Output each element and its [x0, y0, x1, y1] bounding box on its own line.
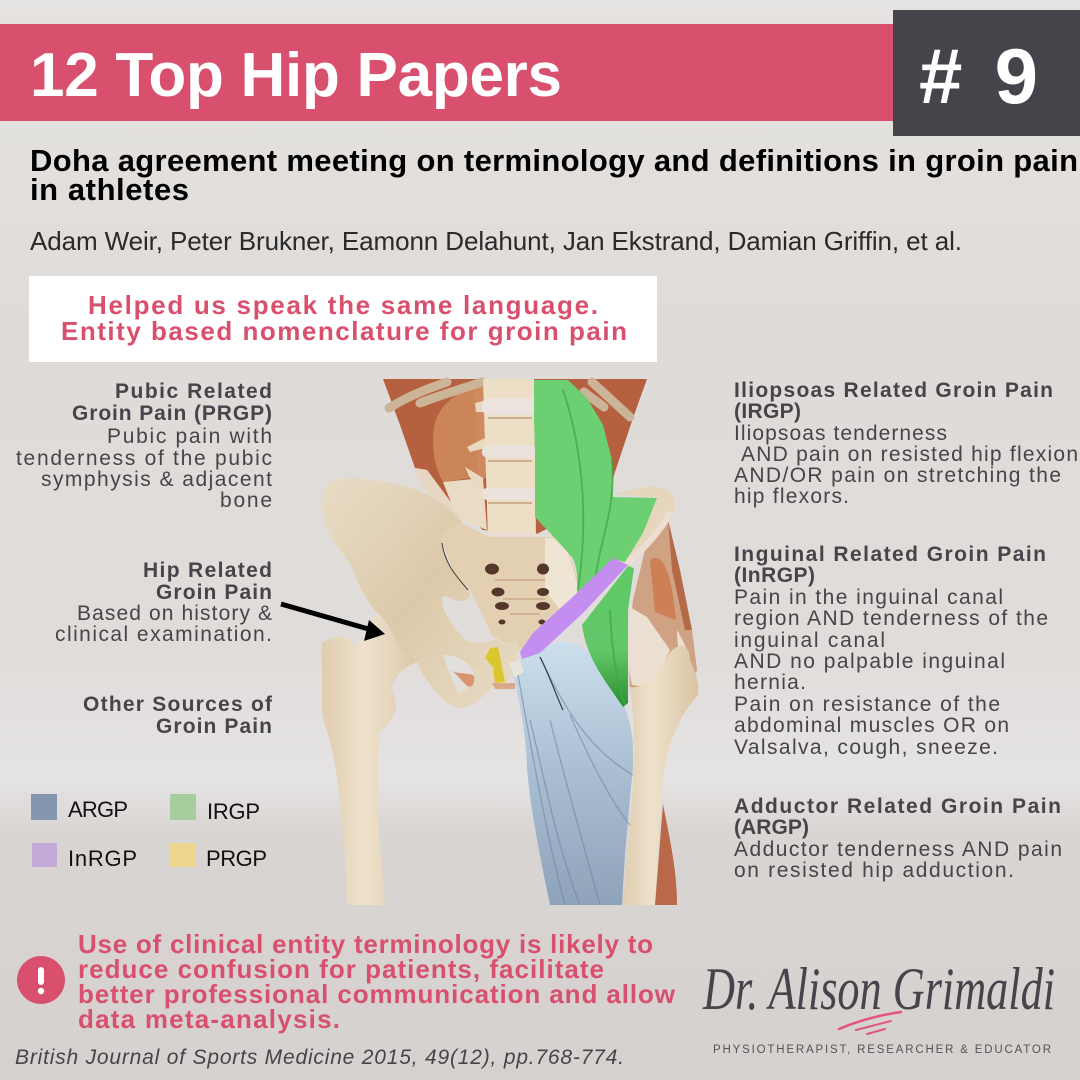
- right label: ARGP: (ARGP): [734, 816, 809, 839]
- adductor muscles (ARGP): [509, 641, 633, 905]
- legend: PRGP: [206, 846, 267, 871]
- legend: ARGP: [68, 797, 128, 822]
- orange muscle beside spine: [474, 385, 486, 478]
- right label: InRGP: region AND tenderness of the: [734, 607, 1048, 630]
- left psoas muscle: [433, 385, 484, 482]
- green fibres: [563, 390, 625, 705]
- lower abdominal tendon: [415, 468, 462, 523]
- right label: ARGP: [734, 795, 1062, 882]
- right label: InRGP: [734, 543, 1048, 759]
- pubic underside: [492, 683, 515, 689]
- legend: IRGP: [207, 799, 260, 824]
- left label: PRGP: bone: [220, 489, 272, 512]
- right label: IRGP: [734, 379, 1078, 508]
- obturator foramen: [443, 655, 475, 693]
- left label: other sources: [83, 693, 273, 738]
- left label: PRGP: Groin Pain (PRGP): [72, 402, 272, 425]
- citation: British Journal of Sports Medicine 2015, 49(12), pp.768-774.: [15, 1046, 624, 1069]
- left label: PRGP: symphysis & adjacent: [41, 468, 272, 491]
- right label: IRGP: Iliopsoas tenderness: [734, 422, 947, 445]
- right hip muscles: [628, 520, 697, 690]
- conclusion callout: reduce confusion for patients, facilitate: [78, 954, 604, 984]
- left label: hip related: [55, 559, 272, 646]
- logo: [702, 956, 1055, 1056]
- left label: PRGP: Pubic pain with: [107, 425, 272, 448]
- right hip orange patch: [650, 558, 676, 620]
- back muscles: [383, 379, 647, 535]
- left label: hip related: Based on history &: [77, 602, 272, 625]
- key message box: Entity based nomenclature for groin pain: [61, 316, 627, 346]
- arrow to hip: [281, 604, 385, 641]
- legend: [31, 794, 267, 871]
- right label: InRGP: hernia.: [734, 671, 806, 694]
- left label: hip related: Groin Pain: [156, 581, 272, 604]
- key message box: [29, 276, 657, 362]
- left label: PRGP: [16, 380, 272, 512]
- right label: InRGP: Valsalva, cough, sneeze.: [734, 736, 998, 759]
- anatomy illustration: [322, 379, 698, 905]
- paper heading: [30, 143, 1078, 207]
- right label: InRGP: Pain in the inguinal canal: [734, 586, 1003, 609]
- right label: InRGP: abdominal muscles OR on: [734, 714, 1009, 737]
- paper heading: Doha agreement meeting on terminology and definitions in groin pain: [30, 143, 1078, 178]
- conclusion callout: better professional communication and allow: [78, 979, 676, 1009]
- sacral ridges: [495, 580, 545, 614]
- left label: other sources: Other Sources of: [83, 693, 273, 716]
- conclusion callout: Use of clinical entity terminology is likely to: [78, 929, 653, 959]
- right femur: [623, 646, 698, 905]
- right label: IRGP: hip flexors.: [734, 485, 849, 508]
- key message box: Helped us speak the same language.: [88, 290, 598, 320]
- right label: ARGP: Adductor Related Groin Pain: [734, 795, 1061, 818]
- left label: hip related: Hip Related: [143, 559, 272, 582]
- sacral foramina: [485, 564, 550, 624]
- ribs: [389, 382, 630, 417]
- title banner: [0, 24, 893, 121]
- logo tagline: PHYSIOTHERAPIST, RESEARCHER & EDUCATOR: [713, 1044, 1051, 1056]
- left label: hip related: clinical examination.: [55, 623, 272, 646]
- left femur: [322, 615, 428, 905]
- number badge: # 9: [919, 32, 1038, 120]
- right label: InRGP: inguinal canal: [734, 629, 885, 652]
- conclusion callout: data meta-analysis.: [78, 1004, 340, 1034]
- inguinal tendon strap: [623, 510, 673, 567]
- adductor fibres: [518, 657, 633, 905]
- left label: other sources: Groin Pain: [156, 715, 272, 738]
- left label: PRGP: tenderness of the pubic: [16, 447, 272, 470]
- lower iliopsoas: [582, 566, 634, 707]
- spine: [465, 379, 538, 540]
- right label: InRGP: Pain on resistance of the: [734, 693, 1000, 716]
- right iliac crest: [614, 487, 675, 568]
- sacrum: [442, 523, 580, 650]
- hamstring behind femur: [655, 804, 677, 905]
- sacroiliac joint line: [442, 543, 468, 590]
- right label: InRGP: AND no palpable inguinal: [734, 650, 1005, 673]
- iliopsoas muscle (IRGP): [534, 380, 657, 707]
- right label: ARGP: Adductor tenderness AND pain: [734, 838, 1062, 861]
- right hip tendons: [627, 607, 670, 687]
- sacrum pale wing: [545, 538, 580, 610]
- right label: IRGP: (IRGP): [734, 400, 801, 423]
- right label: InRGP: Inguinal Related Groin Pain: [734, 543, 1046, 566]
- right label: IRGP: AND/OR pain on stretching the: [734, 464, 1061, 487]
- icon: alert: [17, 956, 65, 1004]
- authors: Adam Weir, Peter Brukner, Eamonn Delahunt, Jan Ekstrand, Damian Griffin, et al.: [30, 226, 962, 256]
- legend: InRGP: [68, 846, 137, 871]
- pubic symphysis (PRGP): [485, 647, 505, 683]
- right label: InRGP: (InRGP): [734, 564, 815, 587]
- inguinal ligament band (InRGP): [520, 558, 628, 659]
- right label: ARGP: on resisted hip adduction.: [734, 859, 1014, 882]
- left ilium and pubis: [322, 478, 518, 708]
- number badge: [893, 10, 1080, 136]
- title: 12 Top Hip Papers: [30, 41, 562, 110]
- adductor tendon cap: [509, 660, 524, 678]
- logo swash: [839, 1012, 901, 1034]
- right label: IRGP: AND pain on resisted hip flexion: [741, 443, 1078, 466]
- left label: PRGP: Pubic Related: [115, 380, 272, 403]
- conclusion callout: [78, 929, 676, 1034]
- right label: IRGP: Iliopsoas Related Groin Pain: [734, 379, 1053, 402]
- paper heading: in athletes: [30, 172, 189, 207]
